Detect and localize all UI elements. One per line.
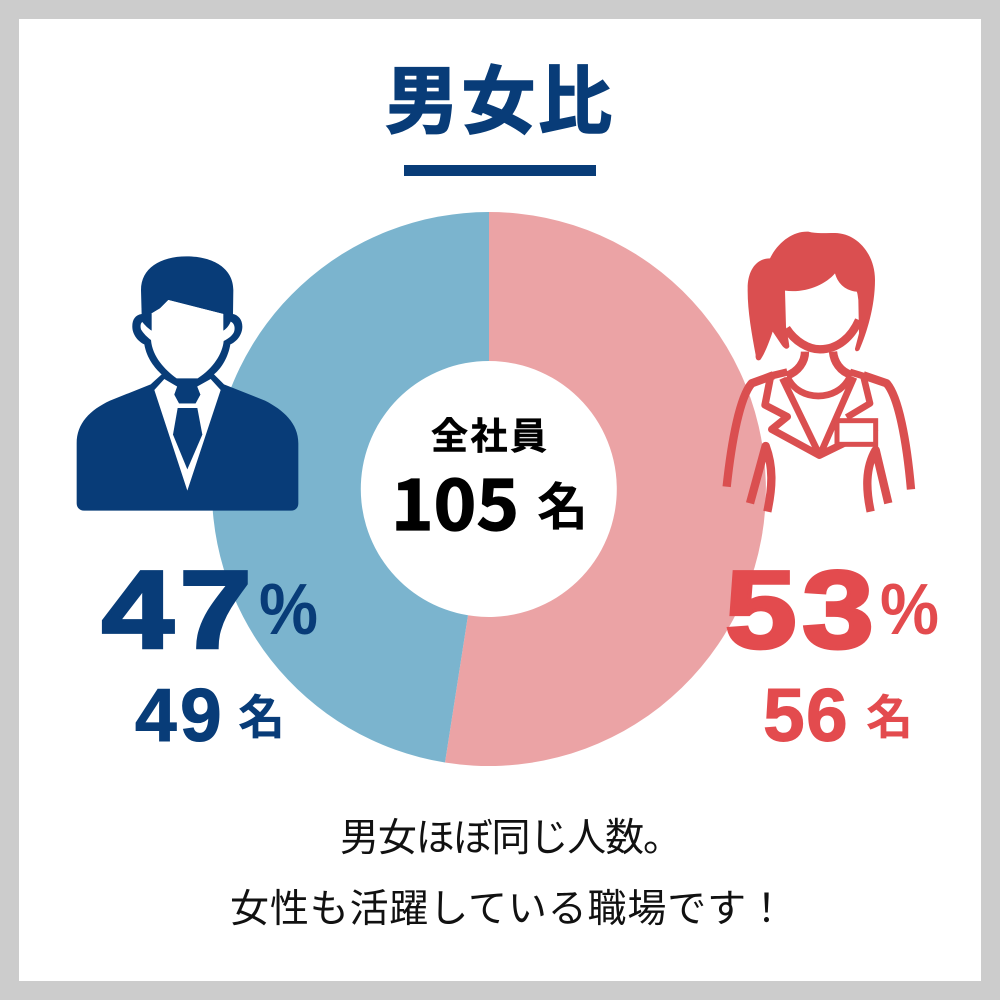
chin (786, 320, 859, 349)
male unit: 名 (238, 679, 285, 748)
head outline and ears (77, 314, 298, 511)
hair (748, 232, 875, 360)
right sleeve (863, 375, 911, 489)
neck right (833, 352, 852, 375)
donut segment: male 47% (212, 212, 489, 762)
female percent sign: % (880, 570, 939, 650)
donut segment: female 53% (445, 212, 766, 766)
title underline (404, 165, 596, 176)
caption (230, 807, 786, 934)
female unit: 名 (866, 679, 913, 748)
left lapel (765, 372, 877, 455)
neckline (787, 377, 850, 396)
outline strokes (727, 320, 911, 512)
female statistic (725, 549, 939, 757)
center label (391, 406, 588, 550)
caption line 1: 男女ほぼ同じ人数。 (340, 807, 682, 863)
neck left (787, 352, 805, 376)
shirt collar (154, 379, 221, 491)
center heading: 全社員 (431, 406, 547, 460)
donut chart (212, 212, 766, 766)
name badge (837, 421, 876, 444)
left sleeve (727, 375, 773, 487)
center unit: 名 (537, 466, 588, 540)
tie (173, 408, 202, 469)
right lapel (820, 372, 870, 455)
title: 男女比 (385, 42, 612, 149)
female count: 56 (763, 673, 848, 757)
left lapel inner (782, 378, 819, 455)
female percent value: 53 (725, 549, 874, 671)
icon: businesswoman (727, 232, 911, 512)
male percent sign: % (259, 570, 318, 650)
center total: 105 (391, 450, 519, 550)
icon: businessman (77, 256, 298, 511)
hair (141, 256, 233, 323)
face (141, 300, 235, 378)
caption line 2: 女性も活躍している職場です！ (230, 878, 786, 934)
male percent value: 47 (102, 549, 251, 671)
right inner arm (867, 450, 888, 512)
tie knot (174, 386, 200, 403)
male statistic (102, 549, 318, 757)
left inner arm (750, 446, 771, 512)
male count: 49 (135, 673, 222, 757)
